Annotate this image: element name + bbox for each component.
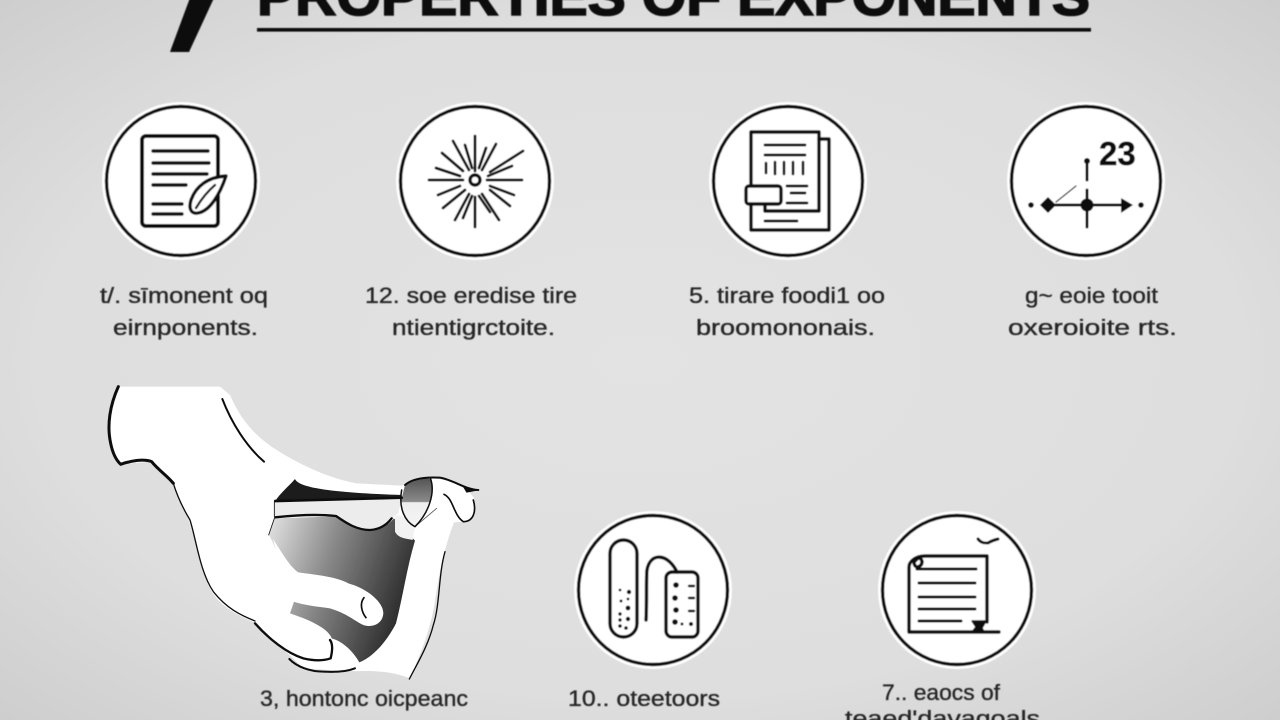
- label: property 2: 12. soe eredise tire: [365, 283, 577, 308]
- light band: [274, 498, 402, 530]
- palm shadow: [269, 516, 415, 662]
- icon: note page with bird: [909, 539, 999, 632]
- panel: property 5: [689, 102, 885, 340]
- label: property 5: [689, 283, 885, 340]
- label: property 1: t/. sīmonent oq: [100, 283, 268, 308]
- label: property 7: 7.. eaocs of: [882, 680, 1001, 705]
- panel: property 7: [845, 511, 1040, 720]
- icon: stacked documents: [746, 132, 829, 230]
- panel: property 10: [568, 511, 732, 711]
- icon: number axis with 23: [1028, 135, 1144, 227]
- icon: document with leaf: [142, 136, 226, 226]
- finger: [273, 538, 383, 626]
- label: property 1: [100, 283, 268, 340]
- icon: number axis with 23: 23: [1099, 135, 1136, 172]
- outlines: [109, 387, 478, 679]
- label: property 2: [365, 283, 577, 340]
- thumb tip: [395, 515, 415, 540]
- panel: property 1: [100, 102, 268, 340]
- label: property 1: eirnponents.: [113, 315, 258, 340]
- label: property 6: [1008, 283, 1177, 340]
- label: property 10: 10.. oteetoors: [568, 686, 720, 711]
- label: property 5: broomononais.: [696, 315, 875, 340]
- label: property 7: [845, 680, 1040, 720]
- illustration: hand: [108, 387, 478, 679]
- label: property 5: 5. tirare foodi1 oo: [689, 283, 885, 308]
- dark wedge: [275, 479, 402, 501]
- icon dots: tube and keypad: [618, 582, 693, 630]
- held ball: [401, 479, 432, 527]
- label: property 6: oxeroioite rts.: [1008, 315, 1177, 340]
- title: [170, 0, 1092, 53]
- panel: property 6: [1007, 102, 1177, 340]
- icon: starburst: [429, 136, 523, 227]
- label: property 6: g~ eoie tooit: [1025, 283, 1159, 308]
- icon: tube and keypad: [610, 540, 698, 637]
- panel: property 2: [365, 102, 577, 340]
- label: property 2: ntientigrctoite.: [392, 315, 555, 340]
- label: property 3: 3, hontonc oicpeanc: [260, 686, 468, 711]
